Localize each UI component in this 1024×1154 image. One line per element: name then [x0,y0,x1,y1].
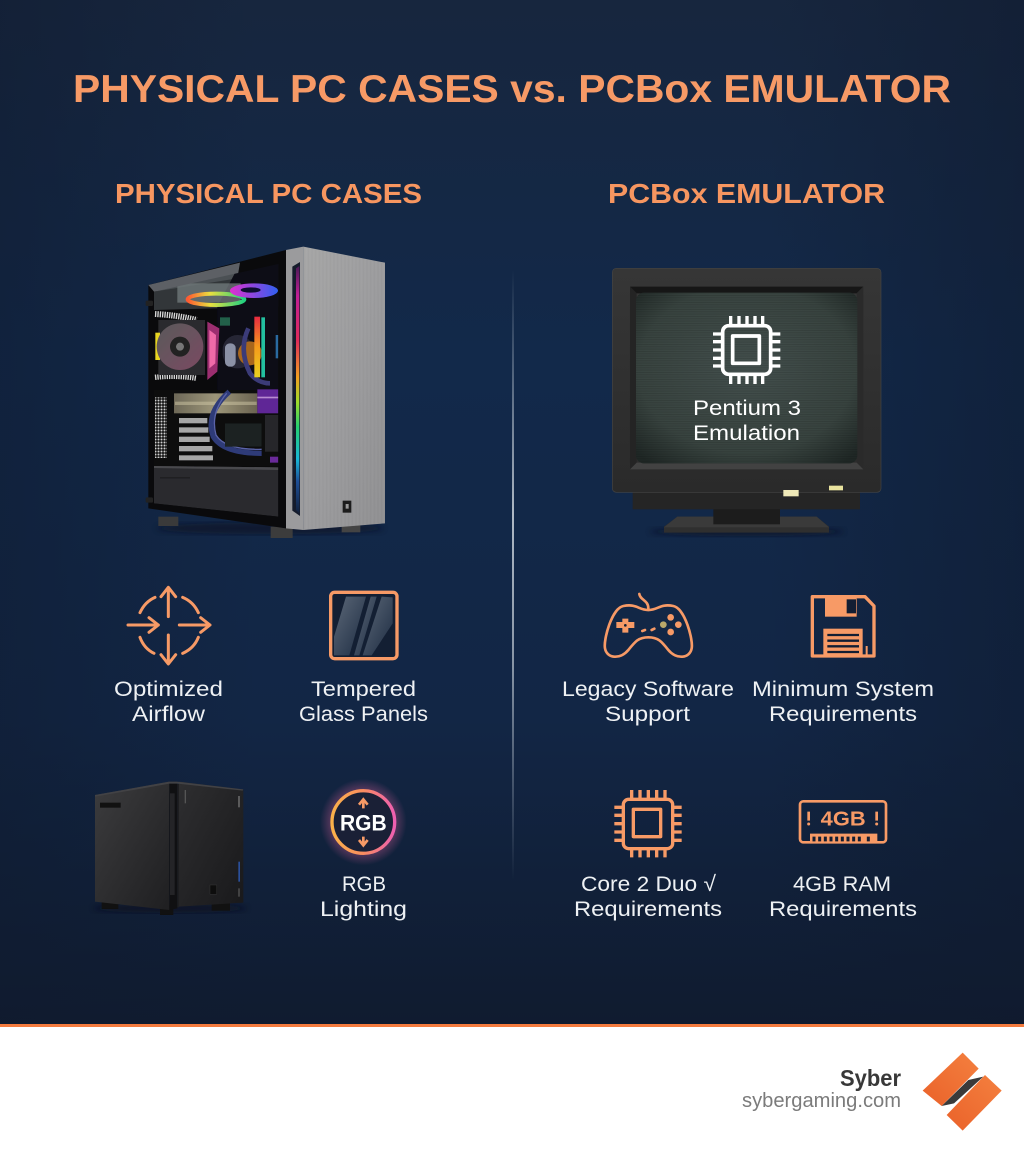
brand URL: sybergaming.com [742,1090,901,1112]
label: Pentium 3 emulation: Pentium 3 [693,396,801,420]
icon and label: tempered glass panels [299,592,428,726]
icon: floppy disk [812,597,874,657]
label: legacy software support [562,677,734,726]
label: Core 2 Duo requirements: Core 2 Duo √ [581,872,716,896]
label: 4GB RAM requirements [769,872,917,921]
label: optimized airflow: Optimized [114,677,223,701]
icon: orange CPU chip [614,790,682,857]
heading: PCBox emulator: PCBox EMULATOR [608,178,885,209]
label: minimum system requirements [752,677,934,726]
icon and label: legacy software support [562,594,734,726]
icon and label: 4GB RAM requirements [769,801,917,921]
label: RGB lighting: Lighting [320,897,407,921]
icon: RGB ring [320,779,407,865]
label: Core 2 Duo requirements [574,872,722,921]
title: PHYSICAL PC CASES vs. PCBox EMULATOR [73,68,951,111]
icon: white CPU chip [713,316,780,384]
icon and label: minimum system requirements [752,597,934,726]
label: minimum system requirements: Minimum System [752,677,934,701]
brand name: Syber [840,1065,901,1091]
label: optimized airflow [114,677,223,726]
image: tower PC case [146,247,385,538]
label: legacy software support: Legacy Software [562,677,734,701]
icon: RAM module [800,801,886,842]
label: Pentium 3 emulation: Emulation [693,421,800,445]
label: RGB lighting: RGB [342,872,386,896]
icon: Syber logo [923,1053,1002,1131]
footer [0,1024,1024,1154]
label: Pentium 3 emulation [693,396,801,445]
label: optimized airflow: Airflow [132,702,206,726]
panel: physical PC cases [93,178,428,921]
label: Core 2 Duo requirements: Requirements [574,897,722,921]
icon: gamepad [605,594,692,657]
label: 4GB RAM requirements: Requirements [769,897,917,921]
icon and label: Core 2 Duo requirements [574,790,722,921]
label: tempered glass panels: Glass Panels [299,702,428,726]
label: tempered glass panels [299,677,428,726]
panel: PCBox emulator [562,178,934,921]
heading: physical PC cases: PHYSICAL PC CASES [115,178,422,209]
image: CRT monitor [612,268,881,536]
label: RGB lighting [320,872,407,921]
label: tempered glass panels: Tempered [311,677,416,701]
label: legacy software support: Support [605,702,690,726]
image: small form factor case [93,782,247,915]
icon: RGB ring: RGB [340,810,387,835]
icon: airflow arrows [128,587,210,664]
icon: glass panel [331,592,397,659]
icon: RAM module: 4GB [821,808,866,831]
icon and label: RGB lighting [320,779,407,921]
label: minimum system requirements: Requirements [769,702,917,726]
icon and label: optimized airflow [114,587,223,726]
label: 4GB RAM requirements: 4GB RAM [793,872,891,896]
